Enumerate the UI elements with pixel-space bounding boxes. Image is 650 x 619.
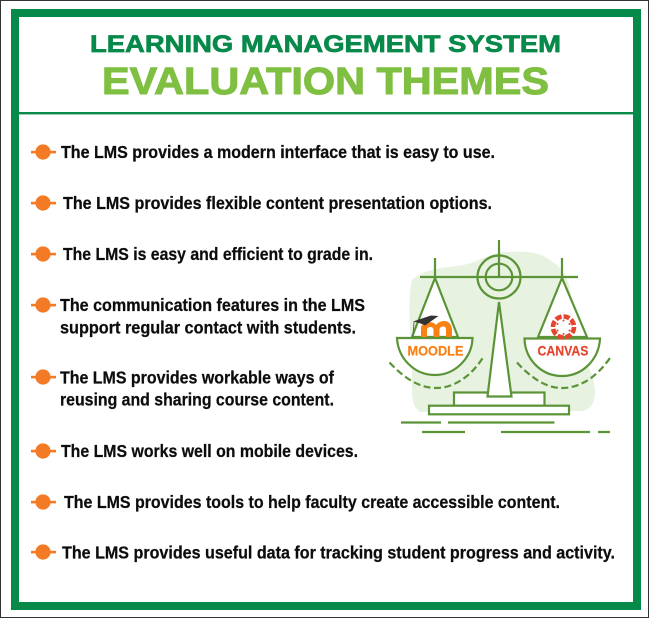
bullet list of evaluation themes: [31, 142, 615, 562]
theme 3: The LMS is easy and efficient to grade in.: [63, 244, 373, 264]
label: MOODLE: MOODLE: [408, 342, 464, 358]
theme 6: The LMS works well on mobile devices.: [61, 441, 358, 461]
icon: Canvas logo: [553, 316, 574, 338]
theme 5: reusing and sharing course content.: [60, 390, 334, 410]
title line 2: EVALUATION THEMES: [102, 61, 549, 103]
theme 4: [31, 295, 365, 338]
theme 4: support regular contact with students.: [60, 318, 356, 338]
theme 1: The LMS provides a modern interface that is easy to use.: [61, 142, 495, 162]
theme 5: The LMS provides workable ways of: [60, 368, 334, 388]
theme 4: The communication features in the LMS: [60, 295, 365, 315]
illustration: balance scale comparing Moodle and Canvas: [390, 240, 610, 432]
theme 5: [31, 368, 334, 410]
title line 1: LEARNING MANAGEMENT SYSTEM: [90, 31, 561, 58]
divider under header: [19, 112, 633, 114]
label: CANVAS: CANVAS: [538, 344, 588, 358]
header: [90, 31, 561, 103]
theme 8: The LMS provides useful data for tracking student progress and activity.: [62, 542, 615, 562]
theme 7: The LMS provides tools to help faculty create accessible content.: [64, 492, 560, 512]
theme 2: The LMS provides flexible content presentation options.: [63, 193, 492, 213]
icon: Moodle logo: [413, 316, 452, 337]
